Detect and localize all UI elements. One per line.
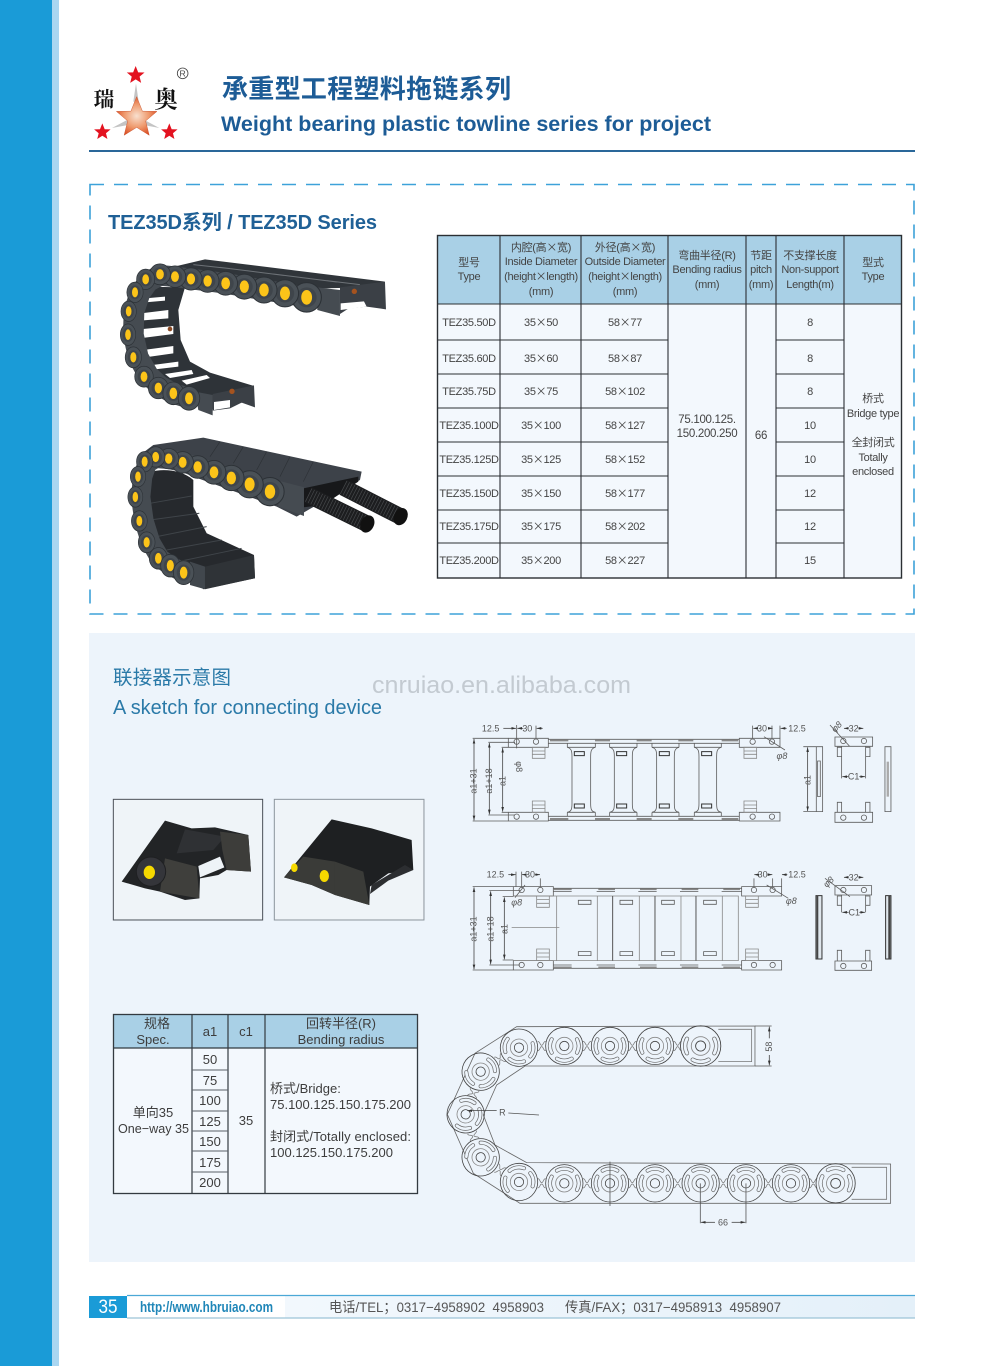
side rails: [508, 738, 780, 821]
table header labels: 节距: [750, 249, 772, 262]
watermark: cnruiao.en.alibaba.com: [372, 672, 631, 699]
table rows: 58×77: [608, 314, 642, 330]
table rows: 15: [804, 555, 816, 567]
specification table: [437, 235, 902, 578]
clamps: [537, 896, 758, 961]
inner slats: [138, 287, 254, 409]
header labels: 回转半径(R): [306, 1016, 376, 1031]
body labels: 75.100.125.150.175.200: [270, 1097, 411, 1112]
header labels: Bending radius: [298, 1032, 385, 1047]
table header labels: Bending radius: [672, 264, 742, 276]
dimension labels: a1+31: [469, 768, 479, 794]
technical drawing: enclosed type: C1: [849, 908, 860, 918]
table rows: 35×200: [521, 552, 561, 568]
body labels: 150: [199, 1134, 221, 1149]
table rows: 12: [804, 488, 816, 500]
holes: [519, 887, 775, 968]
top cover: [140, 438, 362, 517]
dimension arrows: [467, 1027, 769, 1222]
side strip left: [803, 747, 823, 812]
merged cells: Bridge type: [847, 408, 899, 420]
dimensions: [473, 725, 785, 821]
table header labels: 型式: [862, 255, 884, 269]
merged cells: 150.200.250: [677, 428, 737, 440]
table header labels: pitch: [750, 264, 772, 276]
photo: enclosed connector: [274, 799, 424, 920]
technical drawing: enclosed type: [469, 869, 891, 970]
table rows: 8: [807, 353, 813, 365]
chain outline: [447, 1026, 891, 1203]
dimension arrows: [474, 728, 787, 820]
table header labels: Non-support: [781, 264, 839, 276]
table header labels: Type: [458, 271, 481, 283]
dimension labels: a1+31: [469, 916, 479, 942]
company logo: [94, 66, 188, 139]
table rows: 35×125: [521, 451, 561, 467]
table rows: 35×60: [524, 350, 558, 366]
table rows: 10: [804, 420, 816, 432]
dimension labels: 30: [757, 723, 767, 733]
body labels: 100: [199, 1093, 221, 1108]
website: http://www.hbruiao.com: [140, 1299, 273, 1316]
company logo: 奥: [154, 80, 178, 114]
dimension lines: [508, 1026, 772, 1223]
technical drawing: enclosed type: φ8: [821, 875, 836, 889]
company logo: 瑞: [94, 83, 115, 113]
technical drawing: enclosed type: 32: [849, 872, 859, 882]
dimension labels: 12.5: [482, 723, 499, 733]
table rows: 58×152: [605, 451, 645, 467]
table rows: TEZ35.50D: [442, 317, 496, 329]
table header labels: (mm): [529, 286, 553, 298]
table rows: 35×50: [524, 314, 558, 330]
table rows: 58×202: [605, 518, 645, 534]
merged cells: enclosed: [852, 466, 894, 478]
header labels: c1: [239, 1024, 253, 1039]
table rows: 58×127: [605, 417, 645, 433]
table header labels: [458, 239, 885, 298]
holes: [514, 739, 775, 819]
far bracket: [340, 282, 386, 314]
merged cells: 66: [755, 430, 767, 442]
table header labels: Type: [862, 271, 885, 283]
table rows: 10: [804, 454, 816, 466]
technical drawing: bridge type: a1: [803, 775, 813, 785]
near bracket: [317, 287, 340, 316]
side strip right: [886, 896, 891, 959]
side rails: [513, 887, 782, 970]
header background: [113, 1014, 417, 1048]
series heading: TEZ35D系列 / TEZ35D Series: [108, 211, 377, 234]
technical drawing: bridge type: φ8: [829, 719, 844, 734]
dimension labels: a1: [499, 924, 509, 934]
table rows: TEZ35.75D: [442, 386, 496, 398]
merged cells: 75.100.125.: [678, 414, 736, 426]
table rows: 58×102: [605, 383, 645, 399]
table rows: TEZ35.100D: [439, 420, 499, 432]
table header row background: [437, 235, 901, 304]
technical drawing: side view of chain: [444, 1026, 891, 1228]
merged cells: 全封闭式: [852, 435, 895, 449]
left colour bar: [0, 0, 59, 1366]
table header labels: (height×length): [588, 268, 662, 284]
fax: 传真/FAX；0317−4958913 4958907: [565, 1299, 781, 1316]
table rows: 35×75: [524, 383, 558, 399]
company logo: R: [180, 69, 186, 79]
body labels: 200: [199, 1175, 221, 1190]
footer: 35: [98, 1297, 118, 1318]
merged cells: [677, 392, 899, 478]
header labels: a1: [203, 1024, 217, 1039]
side strip left: [816, 896, 822, 959]
body labels: 50: [203, 1052, 217, 1067]
table header labels: 弯曲半径(R): [678, 248, 736, 262]
dimension labels: φ8: [511, 898, 522, 908]
dimension labels: a1+18: [484, 768, 494, 794]
table header labels: (mm): [695, 279, 719, 291]
body labels: 100.125.150.175.200: [270, 1145, 393, 1160]
clamps: [532, 747, 757, 812]
sketch heading: 联接器示意图: [113, 667, 231, 689]
technical drawing: bridge type: C1: [848, 772, 859, 782]
table header labels: (height×length): [504, 268, 578, 284]
dimension labels: a1: [498, 776, 508, 786]
table body background: [437, 304, 901, 578]
table rows: TEZ35.125D: [439, 454, 499, 466]
footer: [89, 1296, 915, 1318]
yellow pivots: [256, 477, 284, 506]
body labels: 桥式/Bridge:: [270, 1081, 341, 1096]
side strip right: [885, 747, 891, 812]
table rows: TEZ35.60D: [442, 353, 496, 365]
Chinese title: 承重型工程塑料拖链系列: [222, 74, 511, 104]
body labels: 75: [203, 1073, 217, 1088]
table header labels: Length(m): [786, 279, 834, 291]
wheels: [546, 1027, 583, 1065]
footer band: [285, 1296, 915, 1318]
photo: open bridge-type chain: [120, 259, 386, 415]
end view: [825, 878, 872, 970]
dimension labels: [469, 869, 806, 942]
dimension labels: 58: [764, 1042, 774, 1052]
table rows: 58×87: [608, 350, 642, 366]
front rail: [133, 275, 307, 398]
body labels: 175: [199, 1155, 221, 1170]
dimension labels: 30: [522, 723, 532, 733]
body labels: 单向35: [133, 1105, 173, 1120]
header labels: 规格: [144, 1016, 170, 1031]
merged cells: Totally: [858, 452, 888, 464]
merged cells: 桥式: [862, 392, 884, 405]
link joints: [538, 1041, 546, 1051]
cross links: [567, 747, 721, 812]
body labels: 35: [239, 1113, 253, 1128]
body labels: 封闭式/Totally enclosed:: [270, 1129, 411, 1144]
technical drawing: bridge type: [469, 719, 891, 822]
dimension labels: 30: [525, 869, 535, 879]
table header labels: 内腔(高×宽): [511, 239, 571, 255]
table grid: [437, 304, 901, 543]
near bracket: [278, 481, 304, 516]
table header labels: 外径(高×宽): [595, 239, 655, 255]
table header labels: (mm): [749, 279, 773, 291]
telephone: 电话/TEL；0317−4958902 4958903: [329, 1299, 544, 1316]
inner wall: [142, 470, 255, 589]
table rows: 58×227: [605, 552, 645, 568]
sketch heading: [113, 667, 382, 719]
end view: [830, 725, 873, 822]
table rows: TEZ35.200D: [439, 555, 499, 567]
dimension labels: 12.5: [487, 869, 504, 879]
table rows: 58×177: [605, 485, 645, 501]
dimension arrows: [474, 875, 787, 969]
table header labels: (mm): [613, 286, 637, 298]
photo: bridge connector: [113, 799, 263, 920]
table rows: 8: [807, 317, 813, 329]
dimension labels: a1+18: [485, 916, 495, 942]
dimension labels: φ8: [777, 751, 787, 761]
dimension labels: 12.5: [788, 869, 806, 879]
page number: [89, 1296, 127, 1318]
dimension labels: 30: [758, 869, 768, 879]
subtitle: Weight bearing plastic towline series for project: [221, 112, 711, 136]
connector size table: [113, 1014, 418, 1194]
cables: [308, 495, 367, 524]
body labels: One−way 35: [118, 1121, 189, 1136]
technical drawing: side view of chain: 66: [718, 1218, 728, 1228]
dimension labels: [469, 723, 806, 794]
table rows: 35×150: [521, 485, 561, 501]
body background: [113, 1048, 417, 1193]
dimension labels: 12.5: [788, 723, 806, 733]
technical drawing: side view of chain: R: [499, 1108, 506, 1118]
panel: TEZ35D series: [90, 184, 914, 614]
sketch heading: A sketch for connecting device: [113, 697, 382, 719]
yellow pivots: [292, 283, 321, 312]
table rows: TEZ35.150D: [439, 488, 499, 500]
header labels: Spec.: [136, 1032, 170, 1047]
table rows: TEZ35.175D: [439, 521, 499, 533]
table header labels: 不支撑长度: [783, 248, 837, 262]
end opening: [205, 555, 255, 589]
photo: enclosed chain with cables: [128, 438, 410, 589]
header rule: [89, 150, 915, 152]
table header labels: Inside Diameter: [505, 256, 578, 268]
table rows: 12: [804, 521, 816, 533]
cover plates: [513, 896, 738, 961]
table rows: 35×100: [521, 417, 561, 433]
panel: connecting device sketch: [89, 633, 915, 1262]
dimension labels: φ8: [786, 896, 797, 906]
table header labels: Outside Diameter: [585, 256, 666, 268]
front rail: [141, 458, 270, 573]
lower bracket: [213, 385, 255, 411]
grid: [113, 1014, 417, 1193]
dimension labels: φ8: [514, 761, 524, 772]
table rows: 35×175: [521, 518, 561, 534]
body labels: 125: [199, 1114, 221, 1129]
body labels: [118, 1052, 411, 1190]
table rows: [439, 314, 816, 568]
dimensions: [473, 872, 788, 970]
header labels: [136, 1016, 385, 1047]
table rows: 8: [807, 386, 813, 398]
technical drawing: bridge type: 32: [849, 724, 859, 734]
table header labels: 型号: [458, 255, 480, 269]
top slats: [160, 259, 385, 288]
